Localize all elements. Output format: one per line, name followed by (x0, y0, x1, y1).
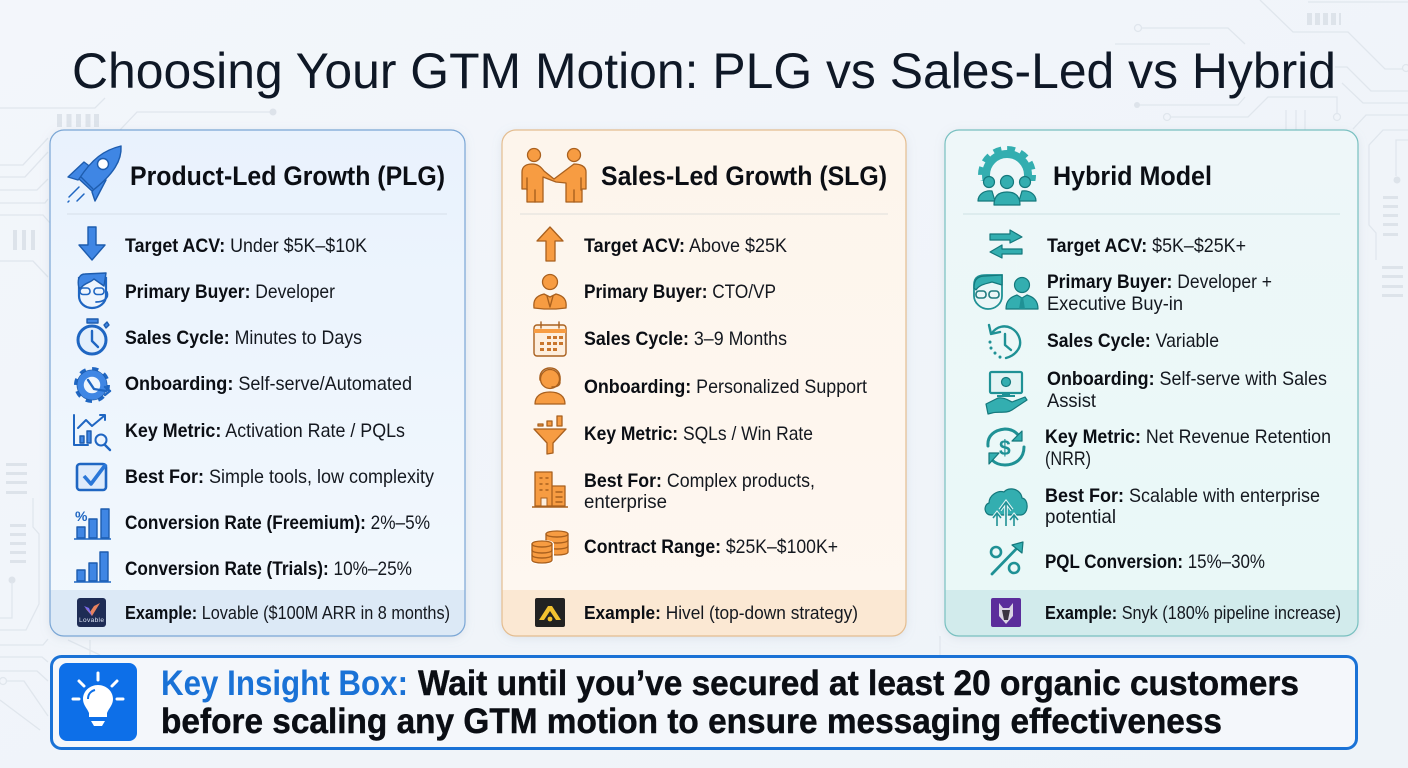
row: best for: potential (1045, 506, 1116, 528)
row: onboarding (986, 368, 1327, 414)
insight text line two: before scaling any GTM motion to ensure messaging effectiveness (161, 702, 1222, 741)
icon: light bulb (59, 663, 137, 741)
row: key metric: Key Metric: SQLs / Win Rate (584, 423, 813, 445)
row: key metric: $ (999, 437, 1011, 460)
row: conversion trials (74, 552, 412, 582)
row: primary buyer: Executive Buy-in (1047, 293, 1183, 315)
row: PQL conversion: PQL Conversion: 15%–30% (1045, 551, 1265, 573)
row: best for: Best For: Scalable with enterprise (1045, 485, 1320, 507)
row: target ACV (990, 230, 1246, 258)
row: target ACV: Target ACV: $5K–$25K+ (1047, 235, 1246, 257)
row: onboarding: Onboarding: Personalized Support (584, 376, 868, 398)
row: contract range (531, 531, 838, 564)
row: key metric: (NRR) (1045, 448, 1091, 470)
row: sales cycle: Sales Cycle: Variable (1047, 330, 1219, 352)
row: best for: Best For: Simple tools, low complexity (125, 466, 434, 488)
row: target ACV (537, 227, 787, 261)
row: key metric (74, 415, 405, 450)
row: example Lovable (77, 598, 450, 627)
row: key metric (534, 416, 813, 454)
icon: handshake (522, 148, 586, 202)
row: primary buyer (78, 273, 335, 308)
row: sales cycle (534, 322, 787, 356)
row: sales cycle (989, 325, 1219, 358)
callout: key insight box (52, 656, 1356, 748)
row: target ACV: Target ACV: Under $5K–$10K (125, 235, 367, 257)
heading: Hybrid: Hybrid Model (1053, 161, 1212, 191)
row: example Lovable: Lovable (79, 617, 104, 624)
row: sales cycle: Sales Cycle: 3–9 Months (584, 328, 787, 350)
row: example Lovable: Example: Lovable ($100M ARR in 8 months) (125, 602, 450, 623)
title: Choosing Your GTM Motion: PLG vs Sales-Led vs Hybrid (72, 43, 1336, 99)
row: conversion freemium: % (75, 508, 88, 524)
row: primary buyer: Primary Buyer: CTO/VP (584, 281, 776, 303)
row: contract range: Contract Range: $25K–$100K+ (584, 536, 838, 558)
row: key metric: Key Metric: Activation Rate / PQLs (125, 420, 405, 442)
heading: PLG: Product-Led Growth (PLG) (130, 161, 445, 191)
row: conversion freemium: Conversion Rate (Freemium): 2%–5% (125, 512, 430, 534)
row: sales cycle: Sales Cycle: Minutes to Days (125, 327, 362, 349)
icon: gear with team (978, 148, 1036, 205)
row: target ACV: Target ACV: Above $25K (584, 235, 787, 257)
row: onboarding: Assist (1047, 390, 1097, 412)
row: conversion freemium (74, 508, 430, 539)
row: primary buyer (534, 274, 776, 309)
row: PQL conversion (991, 542, 1265, 574)
row: example Snyk: Example: Snyk (180% pipeline increase) (1045, 602, 1341, 623)
row: best for: enterprise (584, 491, 667, 513)
panel: Sales-Led Growth (502, 130, 906, 636)
row: example Snyk (991, 598, 1341, 627)
row: onboarding: Onboarding: Self-serve/Automated (125, 373, 412, 395)
row: primary buyer: Primary Buyer: Developer (125, 281, 335, 303)
row: primary buyer: Primary Buyer: Developer + (1047, 271, 1272, 293)
row: example Hivel: Example: Hivel (top-down strategy) (584, 602, 858, 623)
row: onboarding (535, 368, 868, 404)
row: sales cycle (78, 319, 362, 354)
row: primary buyer (974, 271, 1272, 315)
row: key metric: Key Metric: Net Revenue Retention (1045, 426, 1331, 448)
row: onboarding: Onboarding: Self-serve with Sales (1047, 368, 1327, 390)
row: best for (532, 470, 815, 513)
row: target ACV (79, 227, 367, 260)
icon: rocket (68, 146, 121, 202)
insight label: Key Insight Box: (161, 664, 408, 703)
heading: SLG: Sales-Led Growth (SLG) (601, 161, 887, 191)
row: example Hivel (535, 598, 858, 627)
row: best for: Best For: Complex products, (584, 470, 815, 492)
panel: Product-Led Growth (50, 130, 465, 636)
row: key metric (988, 426, 1331, 470)
row: onboarding (76, 370, 412, 400)
panel: Hybrid Model (945, 130, 1358, 636)
insight text line one: Wait until you’ve secured at least 20 organic customers (418, 664, 1299, 703)
row: best for (985, 485, 1320, 528)
row: conversion trials: Conversion Rate (Trials): 10%–25% (125, 558, 412, 580)
